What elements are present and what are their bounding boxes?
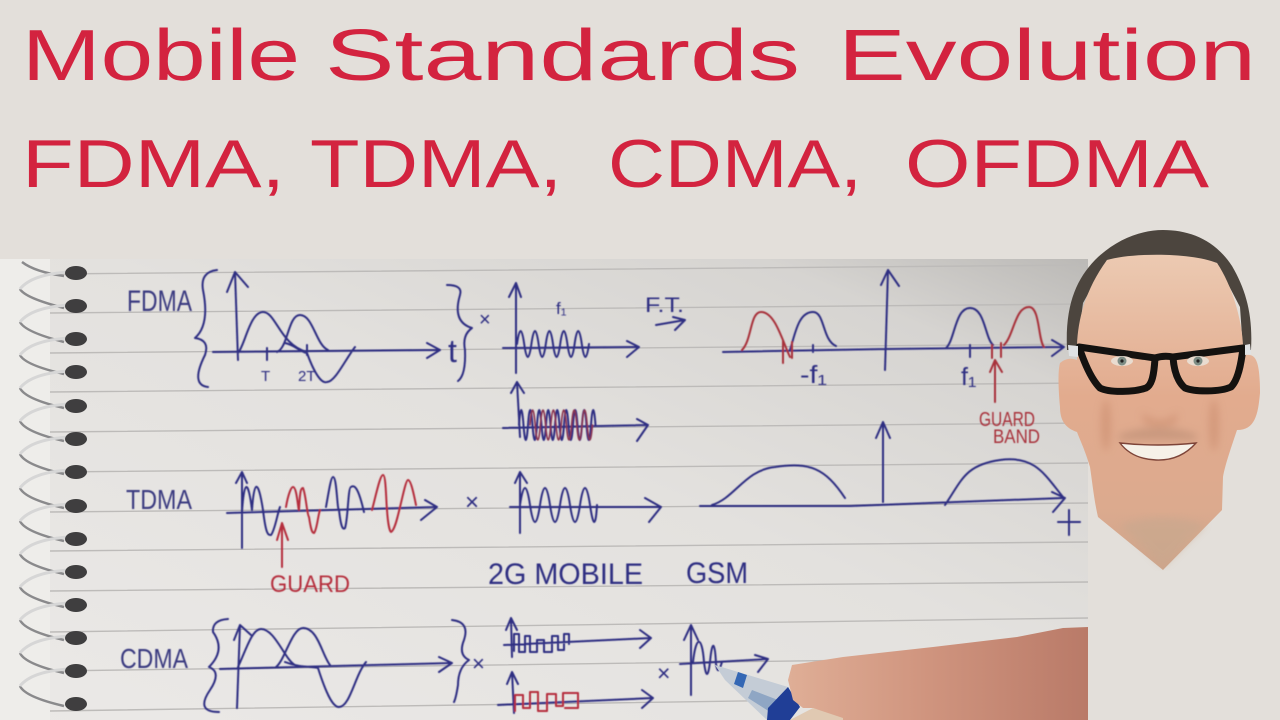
CDMA codes [504, 618, 651, 657]
FDMA row diagrams: BAND [993, 427, 1040, 448]
panel: notebook page [0, 259, 1088, 720]
title: Evolution [838, 16, 1256, 96]
FDMA label: FDMA [127, 285, 192, 318]
icon: hand [788, 627, 1088, 720]
FDMA row diagrams: f₁ [556, 299, 567, 318]
TDMA spectrum [700, 422, 1080, 535]
subtitle [22, 126, 1210, 202]
TDMA carrier [510, 472, 661, 533]
face [1058, 255, 1260, 570]
FDMA row diagrams: 2T [298, 368, 316, 385]
FDMA carrier [503, 283, 639, 373]
glasses temples [1068, 344, 1251, 357]
FDMA row diagrams: t [448, 333, 457, 369]
title: Standards [325, 16, 800, 96]
smile [1120, 443, 1196, 460]
FDMA row diagrams: F.T. [645, 294, 684, 317]
icon: pen [715, 665, 800, 720]
FDMA row diagrams: × [479, 309, 491, 331]
FDMA row diagrams: f₁ [961, 363, 976, 391]
FDMA row diagrams: T [261, 368, 270, 385]
TDMA row diagrams: × [465, 489, 479, 516]
face shading [1101, 399, 1219, 451]
FDMA row diagrams: -f₁ [800, 361, 827, 389]
FDMA row diagrams [127, 270, 1064, 448]
glasses [1079, 347, 1243, 391]
2G GSM note: 2G MOBILE [488, 558, 643, 591]
subtitle: OFDMA [905, 126, 1210, 202]
neck shadow [1120, 518, 1205, 566]
FDMA time signal [195, 270, 440, 387]
second carrier [503, 382, 648, 441]
TDMA row diagrams: GSM [686, 557, 748, 590]
TDMA row diagrams [126, 422, 1080, 598]
FDMA spectrum [723, 270, 1064, 370]
hair [1067, 230, 1251, 350]
CDMA row diagrams [120, 618, 768, 713]
eyes [1111, 356, 1209, 366]
TDMA signal [227, 472, 437, 548]
CDMA carrier [680, 625, 768, 695]
subtitle: FDMA, [22, 126, 285, 202]
portrait: presenter [1058, 230, 1260, 570]
title: Mobile [22, 16, 300, 96]
FDMA row diagrams: GUARD [979, 409, 1035, 431]
subtitle: CDMA, [608, 126, 862, 202]
CDMA label: CDMA [120, 643, 188, 674]
title [22, 16, 1256, 96]
CDMA signal [204, 619, 452, 712]
TDMA row diagrams: GUARD [270, 571, 350, 598]
icon: spiral binding [20, 262, 87, 711]
CDMA row diagrams: × [657, 660, 670, 686]
CDMA row diagrams: × [472, 651, 485, 676]
subtitle: TDMA, [310, 126, 562, 202]
TDMA label: TDMA [126, 484, 192, 515]
